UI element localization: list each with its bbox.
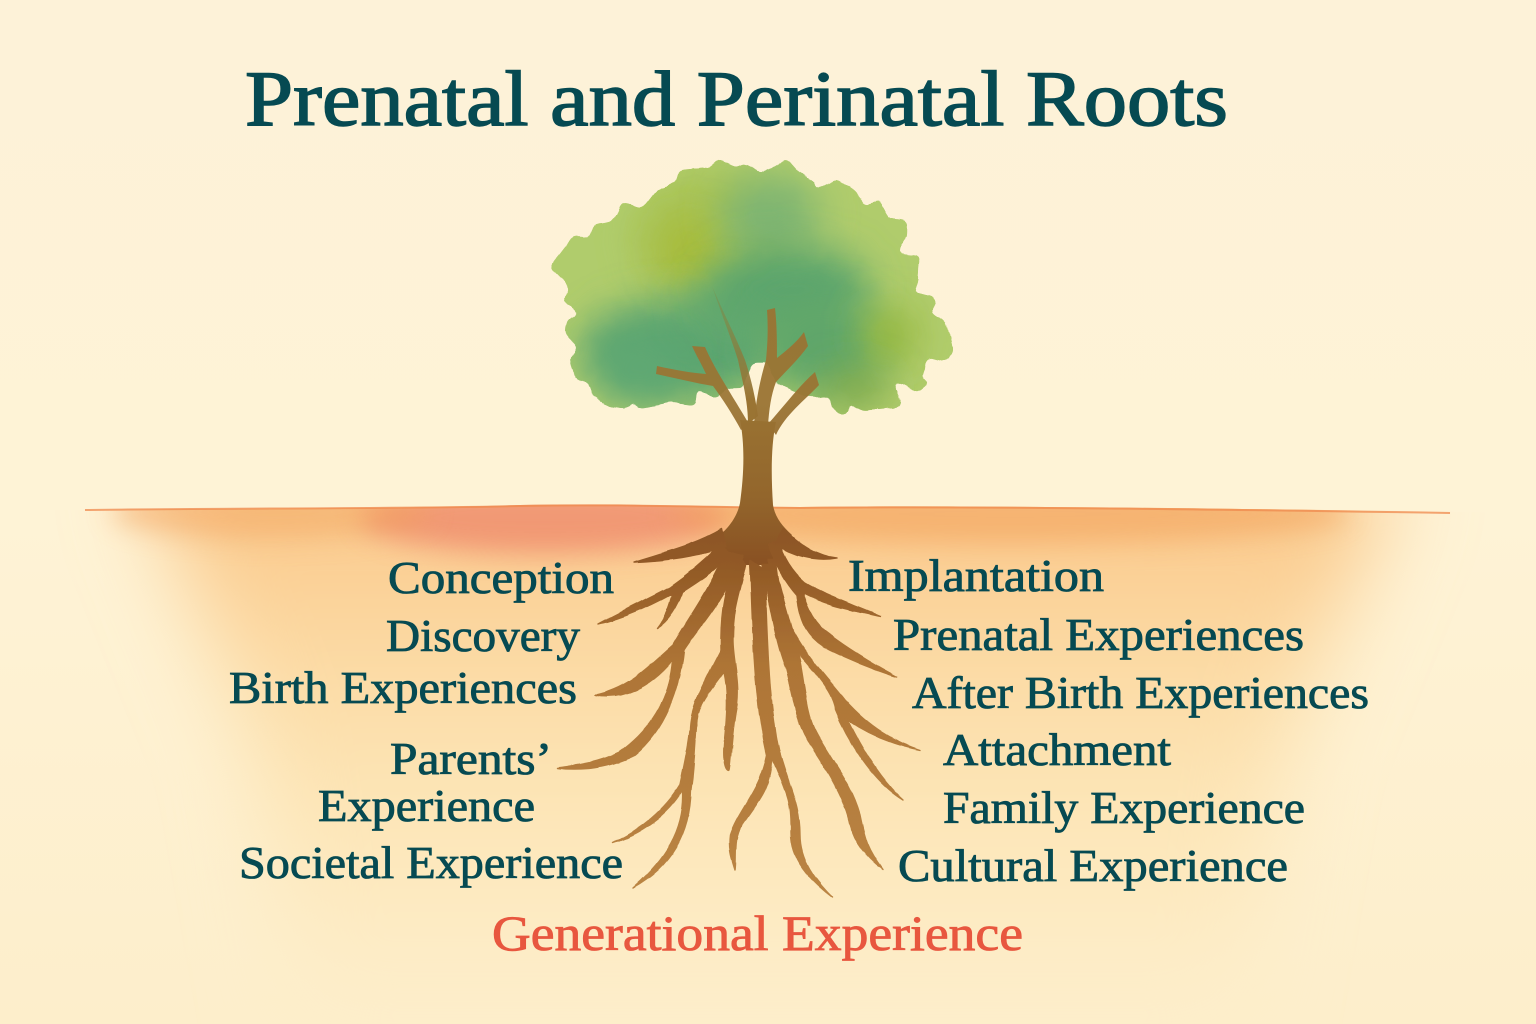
root: Prenatal and After Birth — [768, 540, 897, 677]
label: Attachment: Attachment — [943, 725, 1172, 775]
branch: upper middle — [712, 286, 758, 424]
label: Generational Experience: Generational Experience — [492, 905, 1023, 961]
root: Cultural Experience — [762, 565, 883, 870]
label: Cultural Experience: Cultural Experience — [898, 841, 1288, 891]
label: Prenatal Experiences: Prenatal Experiences — [893, 610, 1304, 660]
left labels — [229, 553, 623, 888]
root: Societal Experience — [613, 555, 746, 888]
tree crown — [551, 160, 953, 414]
tree trunk and branches — [656, 286, 819, 565]
label: Experience: Experience — [318, 781, 535, 831]
soil line — [85, 505, 1450, 513]
label: Parents': Parents’ — [390, 734, 552, 784]
label: After Birth Experiences: After Birth Experiences — [912, 668, 1369, 718]
label: Birth Experiences: Birth Experiences — [229, 663, 577, 713]
trunk body — [716, 420, 792, 565]
root: Discovery — [598, 545, 728, 628]
label: Discovery: Discovery — [386, 611, 581, 661]
label: Societal Experience: Societal Experience — [239, 838, 623, 888]
label: Conception: Conception — [388, 553, 614, 603]
branch: centre fork — [754, 308, 808, 426]
branch: right — [768, 372, 819, 435]
root: Birth Experiences and Parents — [557, 552, 743, 769]
root: Implantation — [775, 528, 837, 559]
root: Generational Experience — [729, 560, 832, 897]
root: Attachment and Family Experience — [768, 560, 920, 800]
label: Family Experience: Family Experience — [943, 783, 1305, 833]
label: Implantation: Implantation — [848, 551, 1104, 601]
soil wash — [98, 504, 1425, 942]
branch: far left — [656, 346, 749, 430]
right labels — [848, 551, 1369, 891]
title: Prenatal and Perinatal Roots — [245, 55, 1228, 142]
root: Conception — [634, 529, 726, 562]
root system — [557, 528, 920, 897]
